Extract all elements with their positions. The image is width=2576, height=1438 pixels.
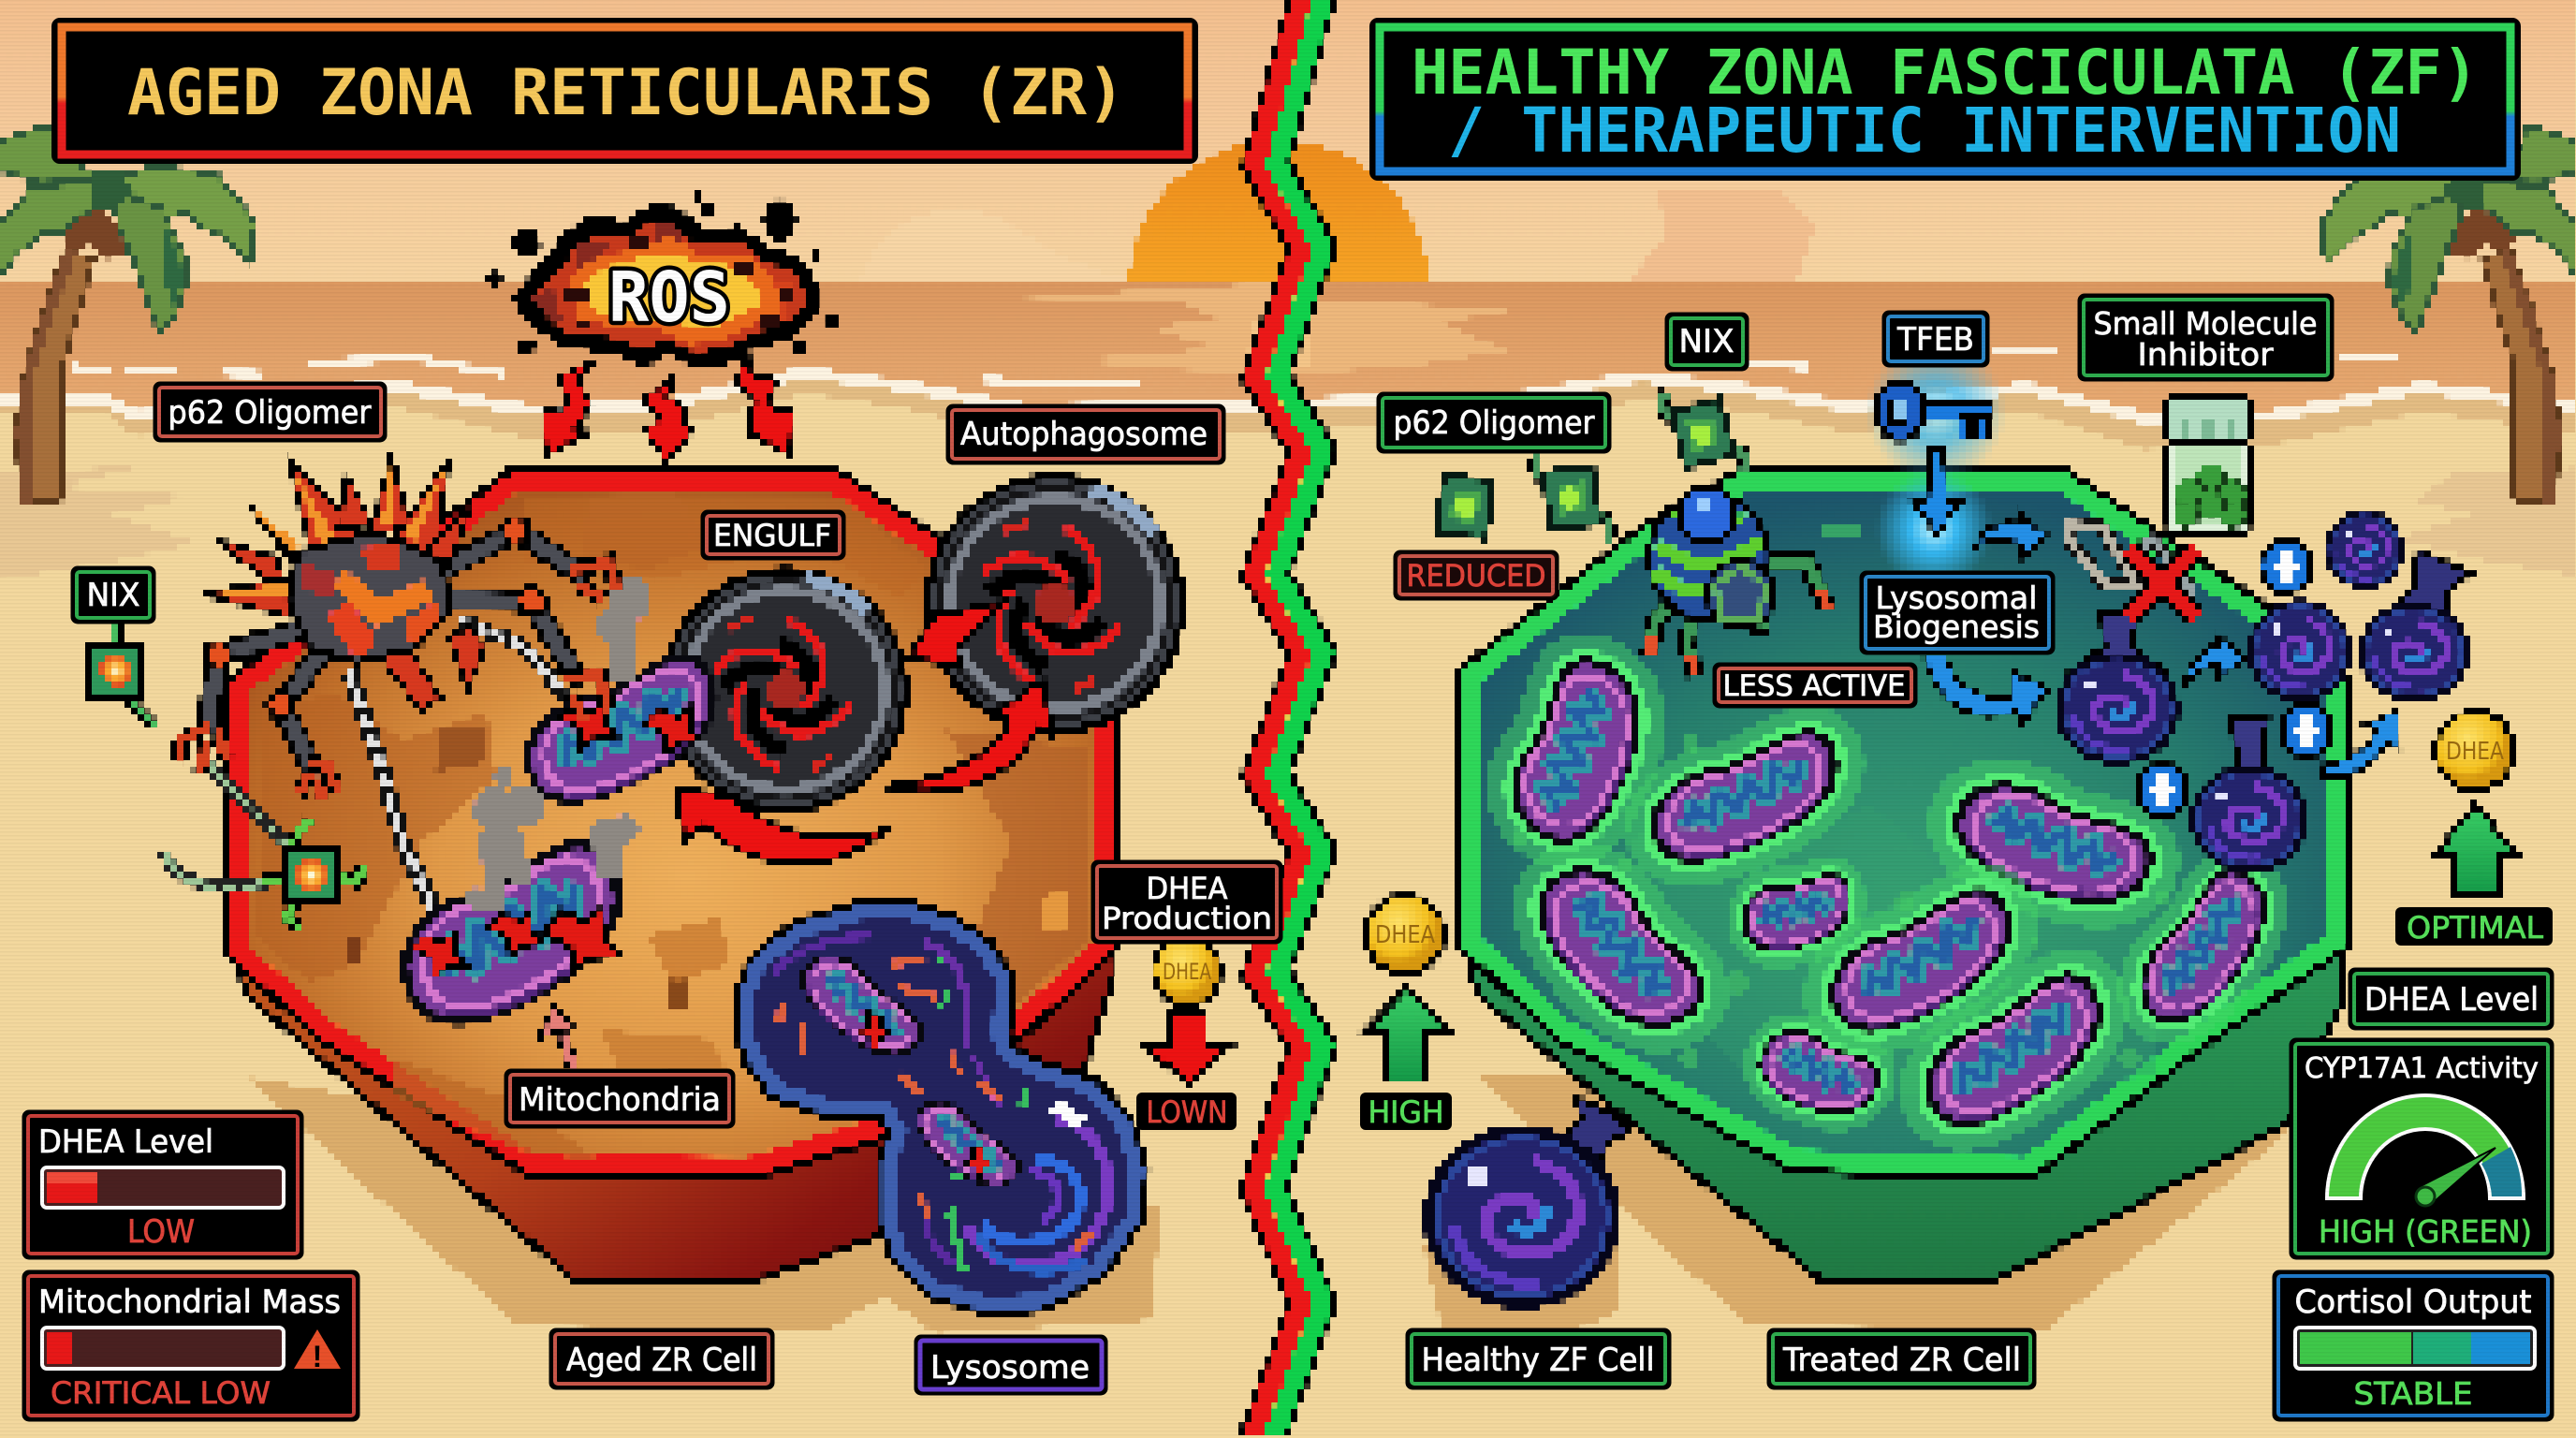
label: lysosomal biogenesis: Biogenesis [1873,609,2040,645]
spikes [201,456,485,712]
icon: warning triangle [294,1329,341,1373]
mid coin [1366,895,1444,974]
label: lysosome: Lysosome [930,1349,1090,1387]
panel: mitochondrial mass: Mitochondrial Mass [38,1284,341,1321]
label: high: HIGH [1368,1094,1443,1130]
free p62 fragments [1436,377,1748,549]
vortex: autophagosome [912,461,1198,747]
panel: DHEA level low [23,1111,302,1258]
gauge [2327,1095,2524,1206]
down arrow [1146,1013,1230,1084]
aged ZR cell [230,480,1114,1281]
bar: cortisol stable [2295,1328,2535,1369]
TFEB key [1866,342,2006,482]
right coin [2436,712,2514,790]
label: treated ZR cell: Treated ZR Cell [1782,1342,2021,1379]
chains [166,620,566,908]
panel: mitochondrial mass [23,1271,359,1420]
palm tree left [0,125,256,503]
lysosome [745,912,1136,1304]
red X [2128,549,2195,618]
legs [208,531,588,777]
label: lysosomal biogenesis: Lysosomal [1876,580,2037,616]
panel: mitochondrial mass: CRITICAL LOW [51,1375,271,1411]
cell shadows on sand [245,1077,2290,1348]
body [288,532,451,663]
label: p62 oligomer left: p62 Oligomer [168,394,372,432]
label: treated ZR cell [1768,1329,2035,1388]
label: autophagosome [947,405,1224,463]
healthy mitochondria [1492,651,2290,1141]
label: mitochondria: Mitochondria [519,1081,721,1119]
lightning bolts [543,353,793,463]
up arrow right [2434,803,2518,896]
label: optimal: OPTIMAL [2407,910,2543,946]
lysosome flecks [779,960,1090,1255]
label: DHEA production: Production [1102,901,1272,936]
title: aged zona reticularis [54,21,1195,161]
label: lysosome [915,1336,1106,1394]
large vesicle bottom left [1428,1097,1631,1304]
label: small molecule inhibitor [2079,295,2333,380]
small blue arrow to chain [1977,510,2046,559]
panel: CYP17A1 activity [2291,1039,2553,1258]
broken chain [2069,524,2195,594]
lysosome vesicles [2058,512,2471,871]
mitochondria pointer arrow [539,1005,575,1072]
biogenesis curved arrow [1925,655,2050,723]
label: TFEB: TFEB [1896,321,1974,359]
label: TFEB [1883,312,1988,366]
panel: DHEA level low: LOW [127,1213,195,1251]
red curved arrow under vortex [676,788,887,863]
label: LOWN: LOWN [1146,1094,1228,1130]
panel: cortisol output: Cortisol Output [2295,1284,2531,1321]
label: mitochondria [505,1070,734,1127]
panel: cortisol output [2274,1271,2553,1420]
panel: CYP17A1 activity: CYP17A1 Activity [2305,1052,2539,1085]
label: less active: LESS ACTIVE [1722,669,1906,703]
panel: DHEA level low: DHEA Level [38,1123,213,1161]
aged cell side wall [230,843,1114,1281]
aged cell cytoplasm and membrane [238,480,1103,1167]
sand [0,379,2576,1438]
treated cell side wall [1463,936,2345,1281]
NIX protein left (free) [84,623,154,726]
label: reduced: REDUCED [1406,558,1546,594]
cytoplasm patches [257,492,1090,1161]
label: DHEA production: DHEA [1146,871,1228,906]
label: NIX left: NIX [86,577,140,614]
damaged mitochondrion lower [382,832,646,1042]
ROS explosion [487,193,841,368]
title: aged zona reticularis: AGED ZONA RETICULARIS (ZR) [127,56,1125,130]
label: DHEA production [1092,861,1281,943]
foam [0,373,2576,418]
label: DHEA level right: DHEA Level [2364,981,2539,1019]
label: healthy ZF cell: Healthy ZF Cell [1421,1342,1655,1379]
title: healthy zona fasciculata / therapeutic intervention: HEALTHY ZONA FASCICULATA (ZF) [1412,37,2479,109]
coin text mid: DHEA [1375,921,1435,949]
coin text left: DHEA [1163,959,1211,985]
coin text right: DHEA [2446,738,2504,766]
up arrow left [1364,989,1448,1081]
treated cell [1463,480,2345,1281]
label: p62 oligomer right: p62 Oligomer [1393,404,1595,442]
label: aged ZR cell: Aged ZR Cell [566,1342,757,1379]
label: reduced [1395,551,1558,599]
label: NIX left [72,567,154,623]
bar: DHEA low [42,1167,284,1208]
label: autophagosome: Autophagosome [960,416,1208,453]
damaged mitochondrion top [511,648,736,817]
sun [1129,140,1428,285]
label: NIX right: NIX [1679,323,1734,360]
smoke [466,577,651,910]
claws [178,562,618,800]
title: healthy zona fasciculata / therapeutic intervention: / THERAPEUTIC INTERVENTION [1448,95,2401,167]
vortex: engulfing autophagosome [666,570,905,810]
label: engulf [702,511,844,559]
TFEB down arrow and glowing orb [1876,449,1992,587]
red curved arrow into autophagosome [885,680,1054,792]
label: healthy ZF cell [1407,1329,1670,1388]
blue arrow out to coin [2321,710,2399,777]
ROS label: ROS [608,257,730,338]
lysosome swirl [772,936,1108,1270]
blue small arrow to vesicle [2183,632,2243,690]
bar: mitochondrial mass [42,1328,284,1369]
inhibitor pill bottle [2164,395,2252,534]
label: small molecule inhibitor: Inhibitor [2138,336,2274,373]
treated cell membrane and cytoplasm [1469,480,2337,1167]
label: NIX right [1666,314,1748,370]
label: DHEA level right [2349,969,2553,1029]
label: p62 oligomer right [1378,393,1610,452]
plus icons [2138,540,2331,816]
coin left [1153,935,1221,1006]
palm tree right [2320,125,2576,503]
panel: CYP17A1 activity: HIGH (GREEN) [2319,1213,2532,1250]
label: aged ZR cell [550,1329,773,1388]
NIX protein tethered [265,817,362,930]
icon: warning triangle: ! [313,1340,322,1373]
p62 oligomer spider (aged) [166,456,618,908]
label: small molecule inhibitor: Small Molecule [2093,305,2318,342]
title: healthy zona fasciculata / therapeutic intervention [1372,21,2518,178]
red arrow leaving autophagosome [908,601,1004,668]
zigzag divider [1249,0,1325,1438]
panel: cortisol output: STABLE [2353,1375,2473,1412]
label: p62 oligomer left [154,383,386,441]
label: engulf: ENGULF [713,518,831,553]
less-active p62 beetle [1649,487,1827,676]
label: lysosomal biogenesis [1861,572,2054,653]
